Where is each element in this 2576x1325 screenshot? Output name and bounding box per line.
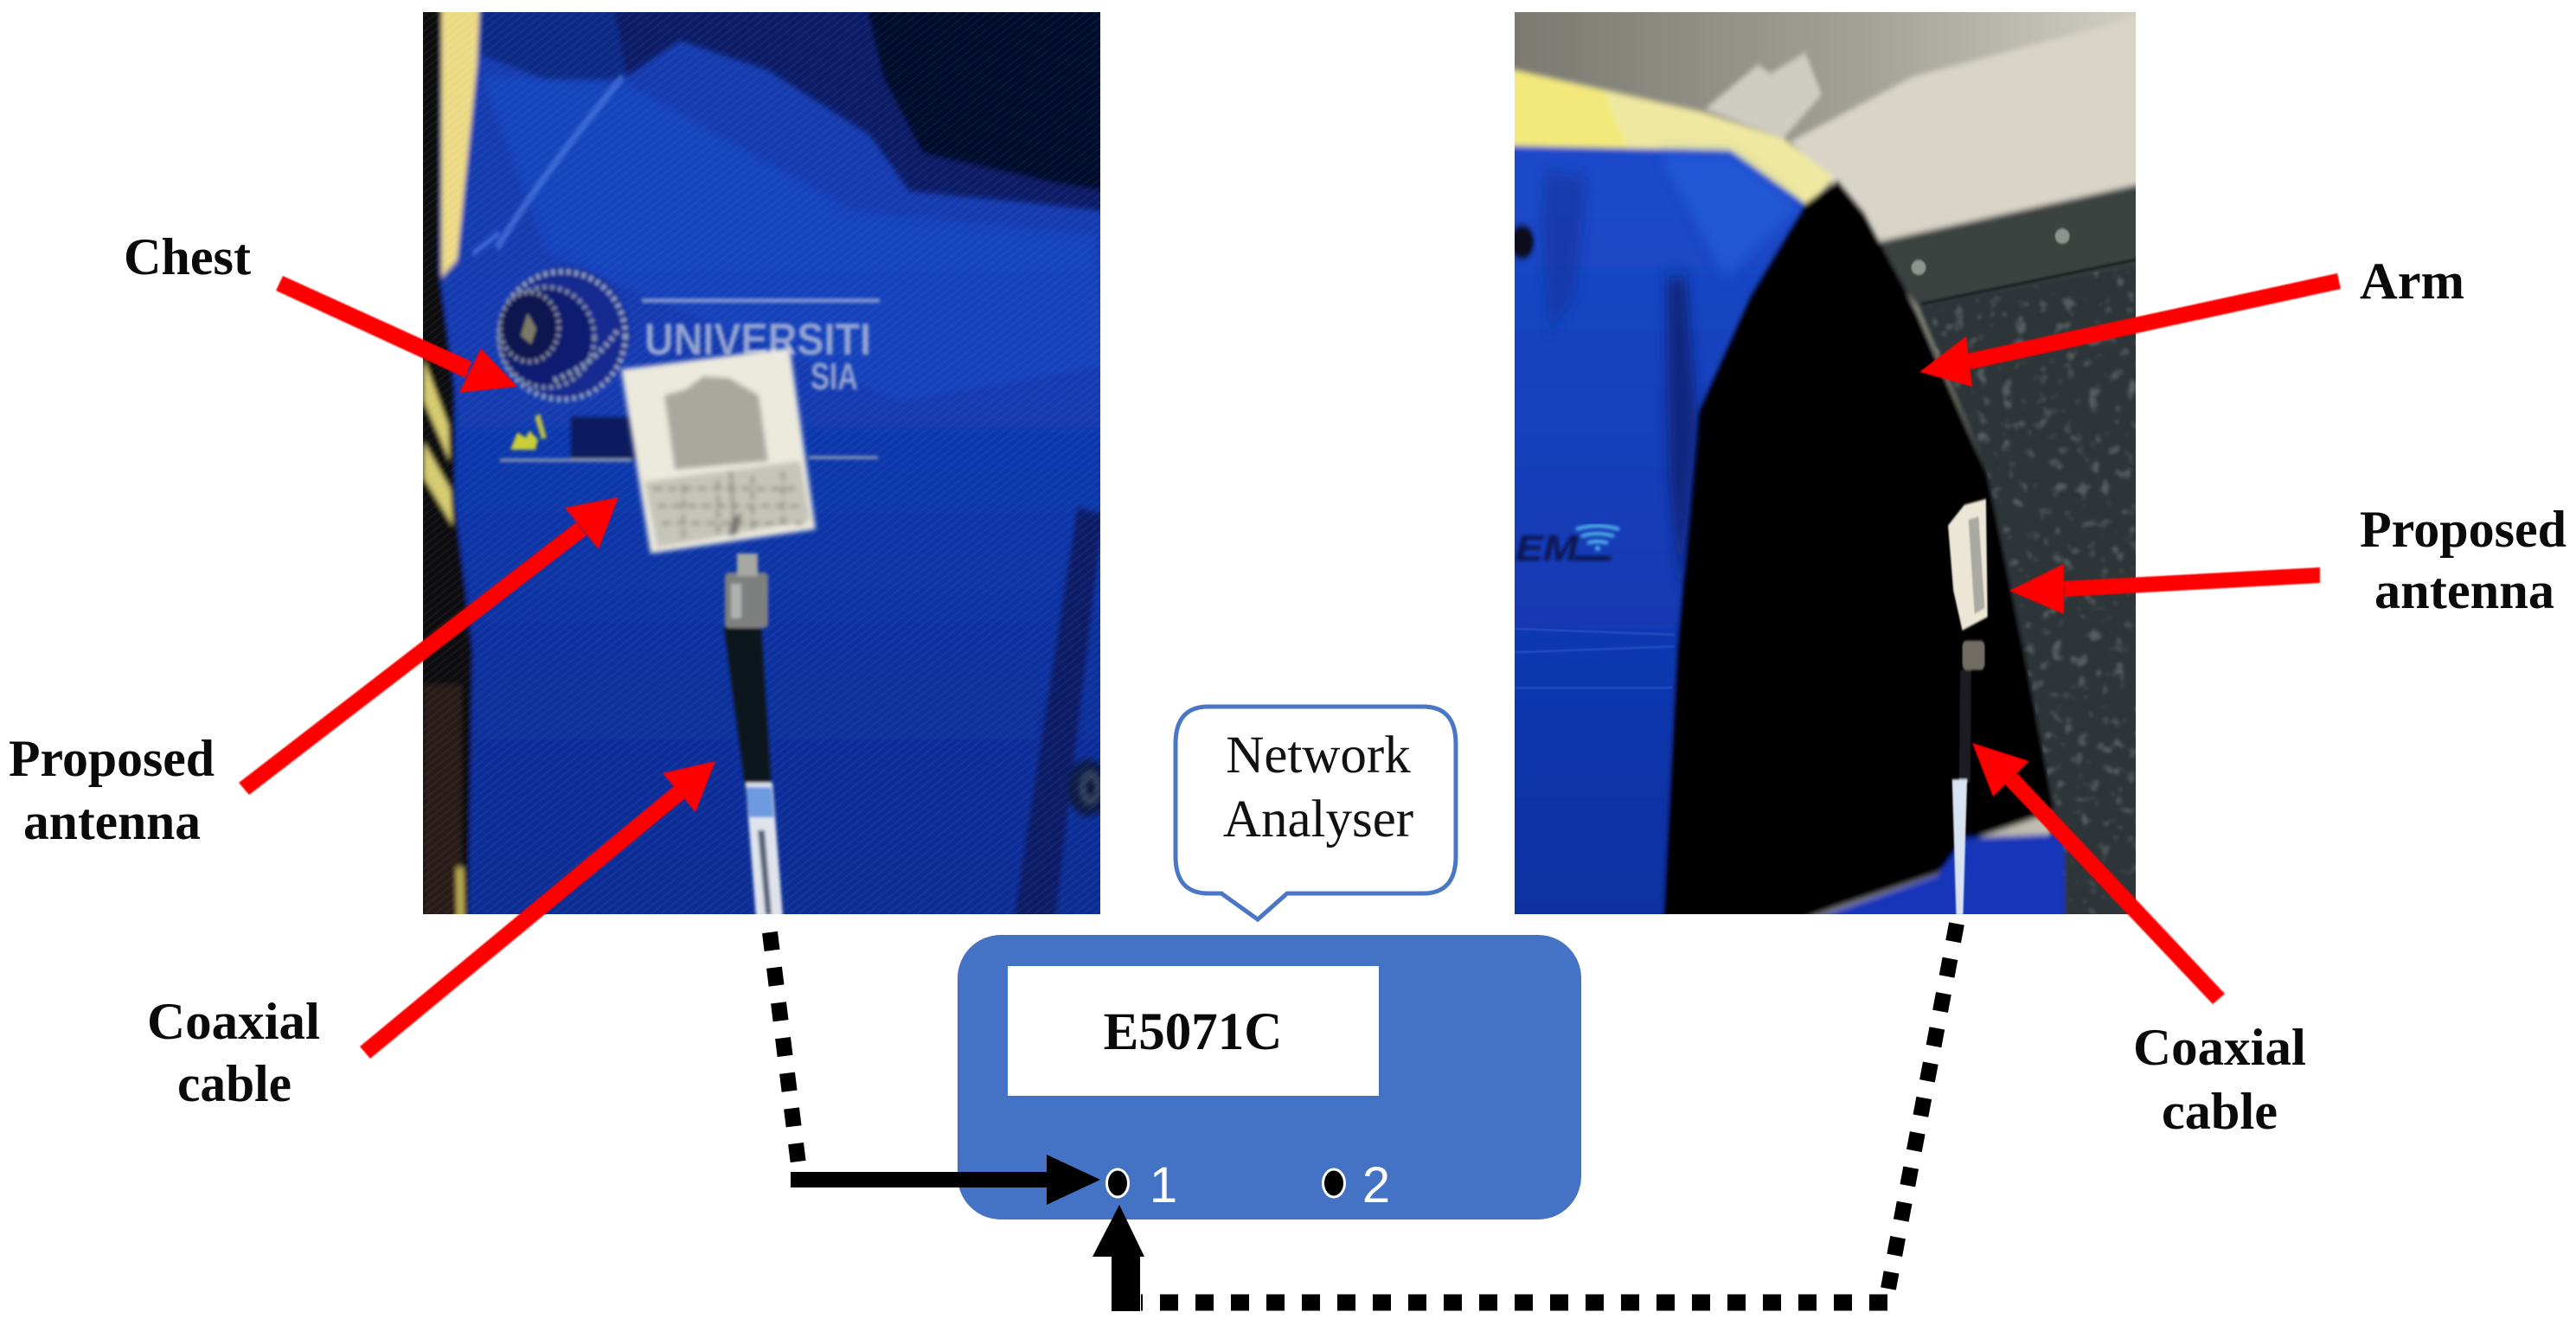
label: Proposed antenna (left) <box>9 730 215 850</box>
dashed connection: arm antenna to port 1 <box>1093 924 1957 1311</box>
red arrow: proposed antenna (right) <box>2009 564 2320 614</box>
label: Arm: Arm <box>2360 253 2464 310</box>
label: Proposed antenna (right): antenna <box>2374 562 2554 619</box>
red arrow: proposed antenna (left) <box>239 497 618 795</box>
label: Proposed antenna (left): antenna <box>23 793 201 850</box>
speckled wall texture <box>1929 272 2136 914</box>
red arrow: coaxial cable (left) <box>360 761 715 1059</box>
arrow up into port 1 <box>1093 1205 1144 1311</box>
dashed connection: chest antenna to port 1 <box>770 932 1100 1205</box>
red arrow: arm <box>1919 273 2341 387</box>
label: Coaxial cable (right): Coaxial <box>2133 1019 2306 1076</box>
red arrow: chest <box>276 276 517 393</box>
photo background: wall, panel, shirt <box>1464 0 2199 974</box>
label: Coaxial cable (right): cable <box>2162 1083 2278 1140</box>
device screen: E5071C <box>1008 966 1379 1096</box>
panel: arm photo <box>1464 0 2199 974</box>
fabric texture <box>423 12 1100 914</box>
callout: Network Analyser: Network <box>1226 727 1411 784</box>
shirt logo <box>1515 526 1619 568</box>
embroidered university logo: SIA <box>811 355 858 398</box>
network analyser device <box>958 935 1581 1219</box>
label: Coaxial cable (left): Coaxial <box>147 993 320 1050</box>
label: Coaxial cable (left) <box>147 993 320 1112</box>
antenna on arm and coaxial cable <box>1948 499 1988 915</box>
photo background: blue shirt <box>423 12 1100 914</box>
port 2 <box>1323 1157 1390 1213</box>
coaxial cable <box>724 554 783 917</box>
label: Proposed antenna (right) <box>2360 501 2566 619</box>
port 1: 1 <box>1150 1157 1177 1213</box>
panel: chest photo <box>423 12 1100 914</box>
shirt logo: EM <box>1515 528 1579 568</box>
embroidered university logo <box>498 267 880 462</box>
red arrow: coaxial cable (right) <box>1972 743 2225 1004</box>
label: Chest: Chest <box>124 228 251 285</box>
embroidered university logo: UNIVERSITI <box>644 315 871 365</box>
label: Coaxial cable (left): cable <box>177 1055 292 1112</box>
port 1 <box>1107 1157 1177 1213</box>
arrow into port 1 <box>791 1155 1100 1205</box>
callout: Network Analyser: Analyser <box>1223 791 1413 848</box>
antenna on chest <box>621 348 816 554</box>
label: Coaxial cable (right) <box>2133 1019 2306 1140</box>
callout: Network Analyser <box>1176 707 1456 919</box>
label: Proposed antenna (right): Proposed <box>2360 501 2566 558</box>
port 2: 2 <box>1362 1157 1390 1213</box>
device screen: E5071C: E5071C <box>1104 1003 1282 1061</box>
label: Proposed antenna (left): Proposed <box>9 730 215 787</box>
